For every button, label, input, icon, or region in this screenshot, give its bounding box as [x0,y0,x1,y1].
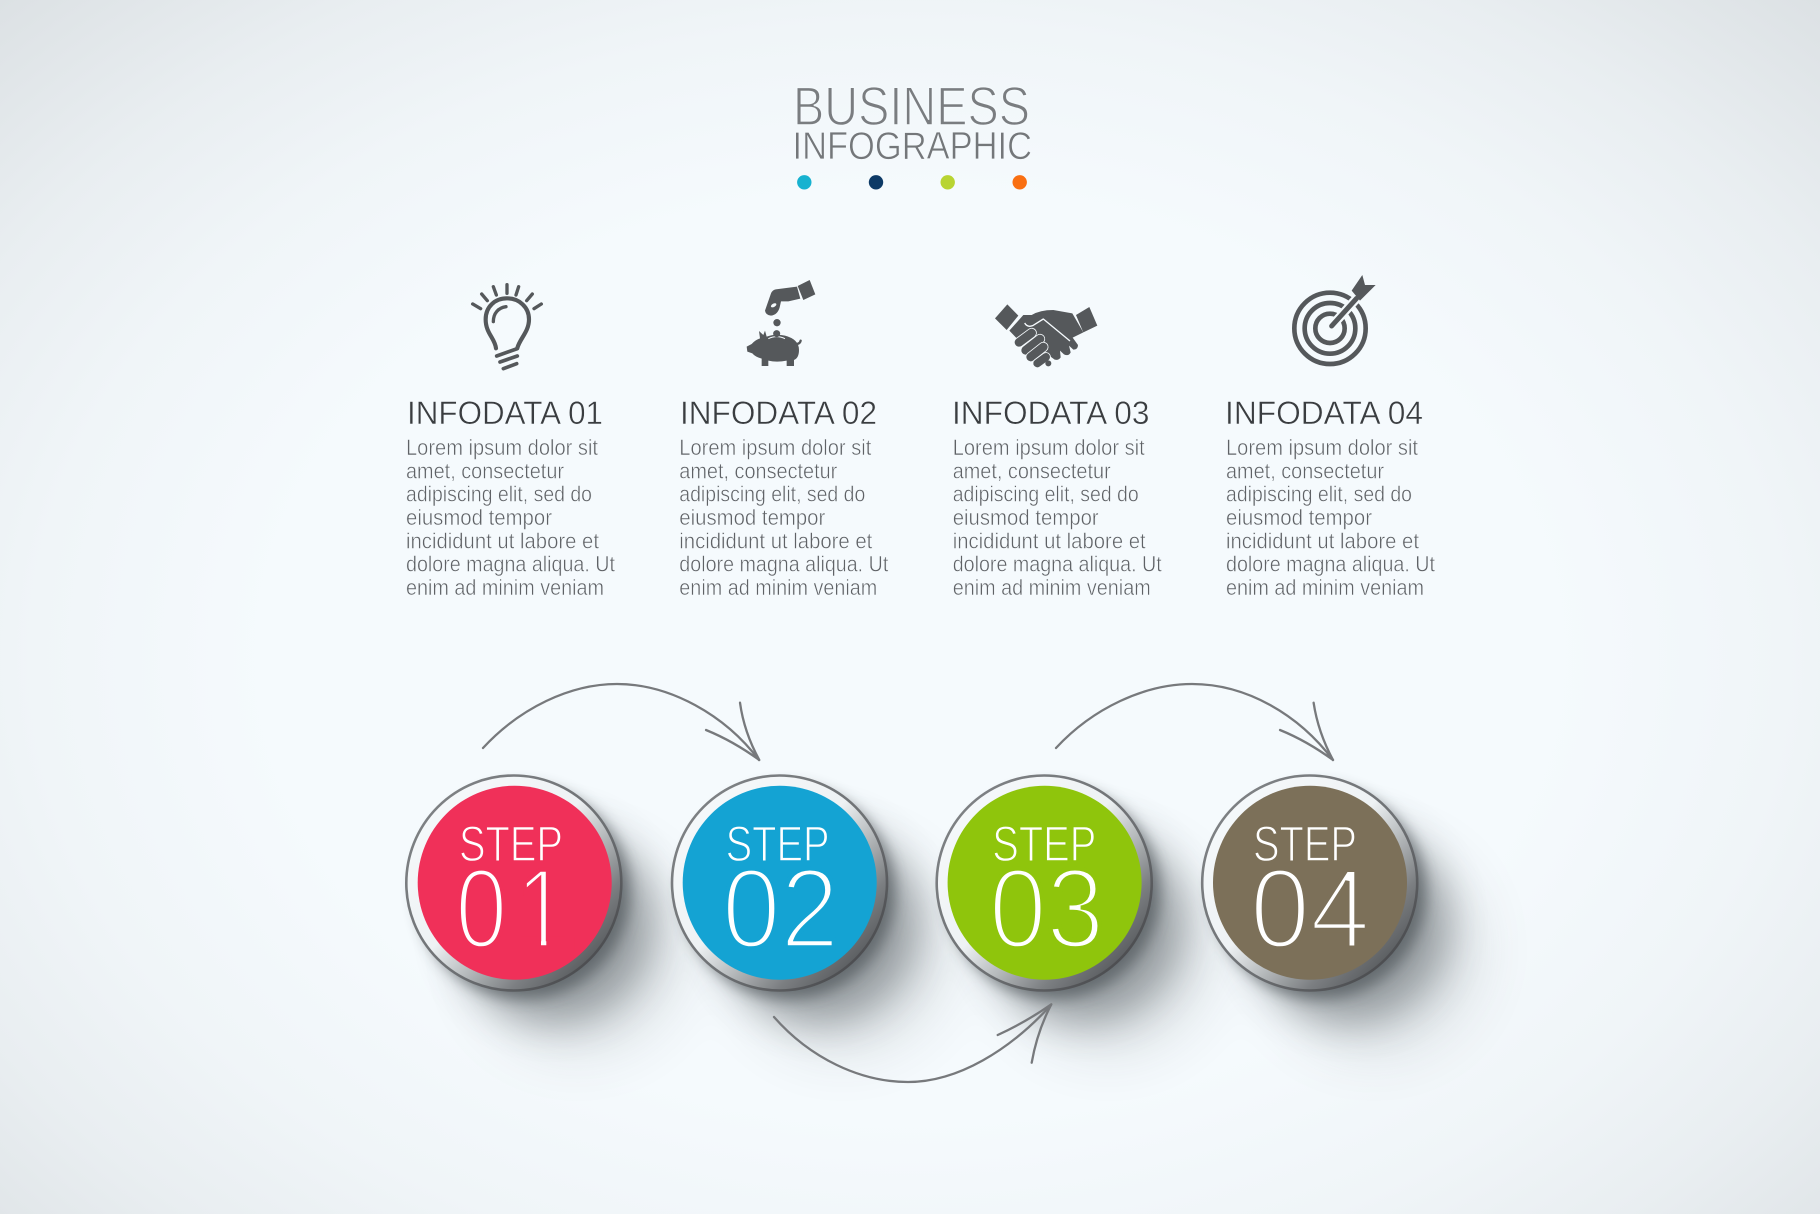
text block: dolore magna aliqua. Ut [406,552,615,577]
title block [792,75,1032,190]
step 02 button: 02 [722,846,839,972]
text block: enim ad minim veniam [1226,575,1424,600]
panel: infodata 03 [952,395,1162,600]
text block: eiusmod tempor [953,505,1099,530]
panel: infodata 02 [679,395,888,600]
arrow: step 3 to step 4 [1056,684,1333,760]
text block: Lorem ipsum dolor sit [679,435,871,460]
cast shadows beneath the step discs [416,785,1474,1048]
text block: enim ad minim veniam [679,575,877,600]
heading: INFODATA 01 [407,395,603,431]
heading: INFODATA 03 [952,395,1150,431]
icon: piggy bank with hand and coin [747,280,815,366]
step 02 button: STEP [726,815,830,872]
step 03 button: STEP [992,815,1096,872]
text block: amet, consectetur [1226,458,1384,483]
step 01 button: 01 [456,845,568,972]
heading: INFODATA 02 [680,395,877,431]
text block [953,435,1162,600]
heading: INFODATA 04 [1225,395,1423,431]
text block: amet, consectetur [406,458,564,483]
colour dots [797,175,1027,190]
step 04 button [1202,776,1417,990]
text block: dolore magna aliqua. Ut [953,552,1162,577]
text block: Lorem ipsum dolor sit [406,435,598,460]
icon: light bulb [473,285,541,369]
text block: incididunt ut labore et [1226,528,1419,553]
text block: adipiscing elit, sed do [679,482,865,507]
arrow: step 1 to step 2 [483,684,759,760]
text block: dolore magna aliqua. Ut [679,552,888,577]
text block: enim ad minim veniam [406,575,604,600]
step 03 button [937,776,1152,990]
text block: amet, consectetur [953,458,1111,483]
step 02 button [672,776,887,990]
step 01 button [406,776,621,990]
text block: adipiscing elit, sed do [406,482,592,507]
arrow: step 2 to step 3 [774,1004,1051,1082]
text block: eiusmod tempor [1226,505,1372,530]
step 04 button: STEP [1253,815,1357,872]
step 03 button: 03 [989,846,1104,972]
panel: infodata 01 [406,395,615,600]
text block: adipiscing elit, sed do [953,482,1139,507]
icon: handshake [995,304,1097,366]
icon: target with arrow [1294,275,1376,364]
text block: Lorem ipsum dolor sit [1226,435,1418,460]
text block: Lorem ipsum dolor sit [953,435,1145,460]
text block: incididunt ut labore et [953,528,1146,553]
text block: eiusmod tempor [406,505,552,530]
step 04 button: 04 [1250,846,1370,972]
text block: amet, consectetur [679,458,837,483]
text block [406,435,615,600]
text block: enim ad minim veniam [953,575,1151,600]
text block [679,435,888,600]
heading: BUSINESS: BUSINESS [793,75,1030,137]
heading: INFOGRAPHIC: INFOGRAPHIC [792,125,1032,168]
text block [1226,435,1435,600]
step 01 button: STEP [459,815,563,872]
text block: incididunt ut labore et [406,528,599,553]
text block: incididunt ut labore et [679,528,872,553]
text block: eiusmod tempor [679,505,825,530]
panel: infodata 04 [1225,395,1435,600]
text block: dolore magna aliqua. Ut [1226,552,1435,577]
text block: adipiscing elit, sed do [1226,482,1412,507]
